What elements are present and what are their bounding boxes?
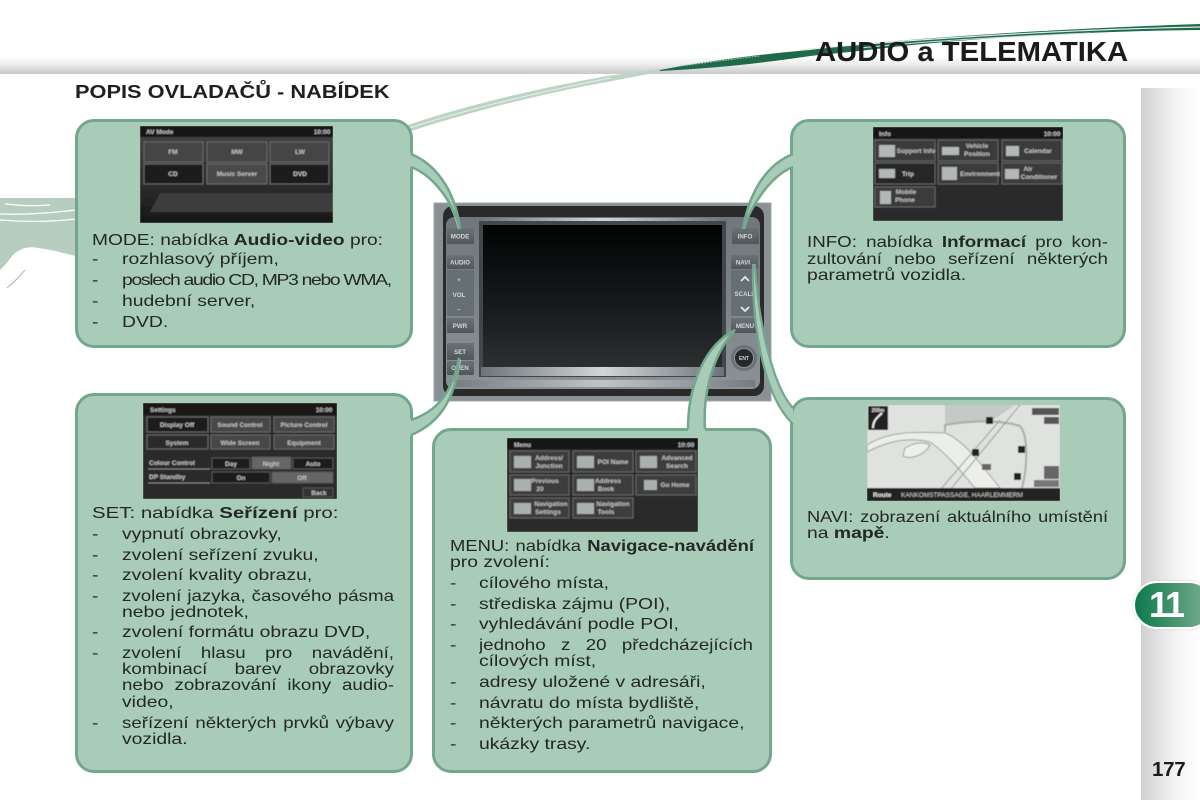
screenshot: Settings: Wide Screen xyxy=(221,440,260,447)
device: head unit xyxy=(434,202,772,402)
text: MENU description xyxy=(450,538,754,752)
text: SET description: nebo jednotek, xyxy=(122,604,249,620)
text: NAVI description: NAVI: zobrazení aktuálního umístění xyxy=(807,508,1108,526)
text: SET description: zvolení hlasu pro navádění, xyxy=(122,644,394,662)
screenshot: Menu: 20 xyxy=(536,486,544,493)
screenshot: map xyxy=(867,405,1060,501)
screenshot: Settings: Back xyxy=(311,490,327,497)
screenshot: Info: Support Info xyxy=(897,148,935,155)
left buttons xyxy=(447,228,474,375)
header band xyxy=(0,56,1200,74)
text: SET description: zvolení formátu obrazu DVD, xyxy=(122,624,370,640)
screenshot: Menu: 10:00 xyxy=(678,442,695,449)
text: MENU description: jednoho z 20 předcházejících xyxy=(479,636,753,654)
text: MENU description: ukázky trasy. xyxy=(479,736,590,752)
screenshot: Menu: Navigation xyxy=(596,501,630,508)
screenshot: Settings: Colour Control xyxy=(149,460,195,467)
screenshot: Info: Vehicle xyxy=(966,143,989,150)
screenshot: Info: Trip xyxy=(902,171,914,178)
screenshot: Menu: Tools xyxy=(598,509,615,516)
screenshot: AV mode: AV Mode xyxy=(146,129,174,136)
screenshot: Info: 10:00 xyxy=(1044,131,1061,138)
text: SET description xyxy=(92,504,394,748)
right buttons xyxy=(731,228,759,371)
text: SET description: - xyxy=(92,624,98,640)
screenshot: Settings: Display Off xyxy=(160,422,195,429)
screenshot: Settings: Equipment xyxy=(287,440,322,447)
text: MENU description: - xyxy=(450,736,456,752)
text: MODE description: rozhlasový příjem, xyxy=(122,250,279,268)
screenshot: Info: Phone xyxy=(895,197,915,204)
right buttons: ENT xyxy=(739,356,749,362)
text: MENU description: pro zvolení: xyxy=(450,554,550,570)
screenshot: AV mode: DVD xyxy=(293,171,307,178)
screenshot: Menu: Junction xyxy=(535,463,563,470)
decorative ribbon xyxy=(408,24,1200,131)
page number: 177 xyxy=(1152,758,1185,781)
left buttons: + xyxy=(457,277,461,284)
text: SET description: zvolení kvality obrazu, xyxy=(122,566,312,584)
text: MODE description: - xyxy=(92,272,98,288)
text: SET description: vypnutí obrazovky, xyxy=(122,526,282,542)
text: NAVI description: na mapě. xyxy=(807,524,890,542)
text: MODE description: DVD. xyxy=(122,314,168,330)
text: MODE description: hudební server, xyxy=(122,292,255,310)
text: SET description: seřízení některých prvků výbavy xyxy=(122,714,394,732)
text: MENU description: vyhledávání podle POI, xyxy=(479,616,679,632)
screenshot: AV mode: Music Server xyxy=(217,171,258,178)
text: MENU description: cílových míst, xyxy=(479,652,596,670)
screenshot: map: 200m xyxy=(872,408,885,414)
text: NAVI description xyxy=(807,508,1108,542)
screenshot: Menu: Address/ xyxy=(535,455,563,462)
screenshot: Menu: Address xyxy=(595,478,621,485)
screenshot: Settings: Picture Control xyxy=(281,422,328,429)
text: MENU description: - xyxy=(450,574,456,592)
text: SET description: - xyxy=(92,588,98,604)
connector: MENU xyxy=(688,330,735,431)
text: MENU description: MENU: nabídka Navigace-navádění xyxy=(450,538,754,554)
panel: MODE xyxy=(75,119,413,348)
screenshot: Info: Position xyxy=(964,151,990,158)
connector: SET xyxy=(410,358,461,436)
text: MENU description: - xyxy=(450,714,456,732)
screenshot: Menu: Advanced xyxy=(661,455,693,462)
screenshot: Info xyxy=(873,127,1063,221)
text: MENU description: některých parametrů navigace, xyxy=(479,714,744,732)
screenshot: map: Route xyxy=(873,492,892,499)
left buttons: MODE xyxy=(451,234,469,240)
screenshot: AV mode: 10:00 xyxy=(314,129,331,136)
text: MENU description: - xyxy=(450,596,456,612)
text: SET description: kombinací barev obrazovky xyxy=(122,660,394,678)
section heading: POPIS OVLADAČŮ - NABÍDEK xyxy=(75,81,390,102)
left buttons: AUDIO xyxy=(450,260,470,266)
text: MENU description: - xyxy=(450,694,456,712)
screenshot: Settings: Day xyxy=(225,461,237,468)
title: AUDIO a TELEMATIKA xyxy=(815,36,1128,67)
text: INFO description: INFO: nabídka Informací pro kon- xyxy=(807,234,1108,250)
text: SET description: - xyxy=(92,644,98,662)
text: MODE description: - xyxy=(92,314,98,330)
right buttons: SCALE xyxy=(735,291,755,298)
screenshot: Menu: Settings xyxy=(535,509,561,516)
left buttons: PWR xyxy=(453,323,468,330)
screen xyxy=(483,225,722,367)
text: MODE description: poslech audio CD, MP3 nebo WMA, xyxy=(122,272,391,288)
right buttons: NAVI xyxy=(736,260,750,266)
connector: NAVI xyxy=(753,265,793,424)
text: MENU description: návratu do místa bydliště, xyxy=(479,694,699,712)
screenshot: Info: Environment xyxy=(960,171,1001,178)
text: SET description: - xyxy=(92,566,98,584)
panel: INFO xyxy=(790,119,1126,348)
text: MENU description: střediska zájmu (POI), xyxy=(479,596,670,612)
text: SET description: - xyxy=(92,546,98,564)
chapter tab 11 xyxy=(1133,581,1200,629)
screenshot: Menu: Go Home xyxy=(661,482,690,489)
text: SET description: video, xyxy=(122,694,174,710)
text: INFO description: zultování nebo seřízení některých xyxy=(807,250,1108,268)
left buttons: SET xyxy=(454,349,466,356)
panel: NAVI xyxy=(790,397,1126,580)
screenshot: AV mode: CD xyxy=(168,171,178,178)
text: SET description: - xyxy=(92,714,98,732)
screenshot: Menu: Search xyxy=(666,463,688,470)
screenshot: Settings: Night xyxy=(263,461,280,468)
text: SET description: zvolení jazyka, časového pásma xyxy=(122,588,394,604)
connector: INFO xyxy=(743,153,794,229)
screenshot: Info: Conditioner xyxy=(1021,174,1058,181)
screenshot: Settings: Auto xyxy=(306,461,320,468)
screenshot: AV mode xyxy=(140,126,333,223)
right buttons: MENU xyxy=(736,323,755,330)
text: MENU description: - xyxy=(450,616,456,632)
text: SET description: SET: nabídka Seřízení pro: xyxy=(92,504,338,522)
text: SET description: - xyxy=(92,526,98,542)
screenshot: Settings: On xyxy=(236,475,246,482)
text: MODE description: - xyxy=(92,292,98,310)
decorative left wave xyxy=(0,198,75,288)
screenshot: Info: Mobile xyxy=(896,189,917,196)
text: INFO description: parametrů vozidla. xyxy=(807,266,966,284)
connector: MODE xyxy=(410,153,460,229)
screenshot: Settings: System xyxy=(165,440,189,447)
right sidebar strip xyxy=(1141,88,1200,800)
panel: MENU xyxy=(432,428,772,773)
left buttons: VOL xyxy=(453,292,466,299)
right buttons: INFO xyxy=(738,234,753,240)
screenshot: Info: Info xyxy=(879,131,891,138)
screenshot: Menu: Book xyxy=(598,486,615,493)
panel: SET xyxy=(75,393,413,773)
left buttons: – xyxy=(457,306,461,313)
text: MODE description: MODE: nabídka Audio-video pro: xyxy=(92,232,383,248)
screenshot: AV mode: FM xyxy=(168,149,178,156)
text: MENU description: cílového místa, xyxy=(479,574,609,592)
text: MENU description: - xyxy=(450,674,456,690)
screenshot: Menu: Navigation xyxy=(534,501,568,508)
screenshot: Settings: Settings xyxy=(150,407,176,414)
text: MODE description: - xyxy=(92,250,98,268)
screenshot: Menu: Previous xyxy=(531,478,559,485)
screenshot: Info: Calendar xyxy=(1024,148,1052,155)
text: MENU description: - xyxy=(450,636,456,654)
screenshot: Menu: POI Name xyxy=(598,459,629,466)
screenshot: Settings xyxy=(143,403,337,499)
text: SET description: zvolení seřízení zvuku, xyxy=(122,546,319,564)
screenshot: Info: Air xyxy=(1023,166,1033,173)
screenshot: Settings: Sound Control xyxy=(217,422,263,429)
chapter tab 11: 11 xyxy=(1149,584,1183,625)
screenshot: Settings: Off xyxy=(297,475,308,482)
screenshot: Settings: DP Standby xyxy=(149,474,186,481)
left buttons: OPEN xyxy=(451,365,469,372)
screenshot: map: KANKOMSTPASSAGE, HAARLEMMERM xyxy=(901,492,1023,499)
text: MENU description: adresy uložené v adresáři, xyxy=(479,674,706,690)
screenshot: AV mode: MW xyxy=(231,149,244,156)
text: INFO description xyxy=(807,234,1108,284)
screenshot: AV mode: LW xyxy=(295,149,306,156)
screenshot: Menu xyxy=(507,438,698,532)
text: SET description: vozidla. xyxy=(122,730,188,748)
screenshot: Settings: 10:00 xyxy=(316,407,333,414)
screenshot: Menu: Menu xyxy=(514,442,531,449)
text: SET description: nebo zobrazování ikony audio- xyxy=(122,676,394,694)
text: MODE description xyxy=(92,232,391,330)
